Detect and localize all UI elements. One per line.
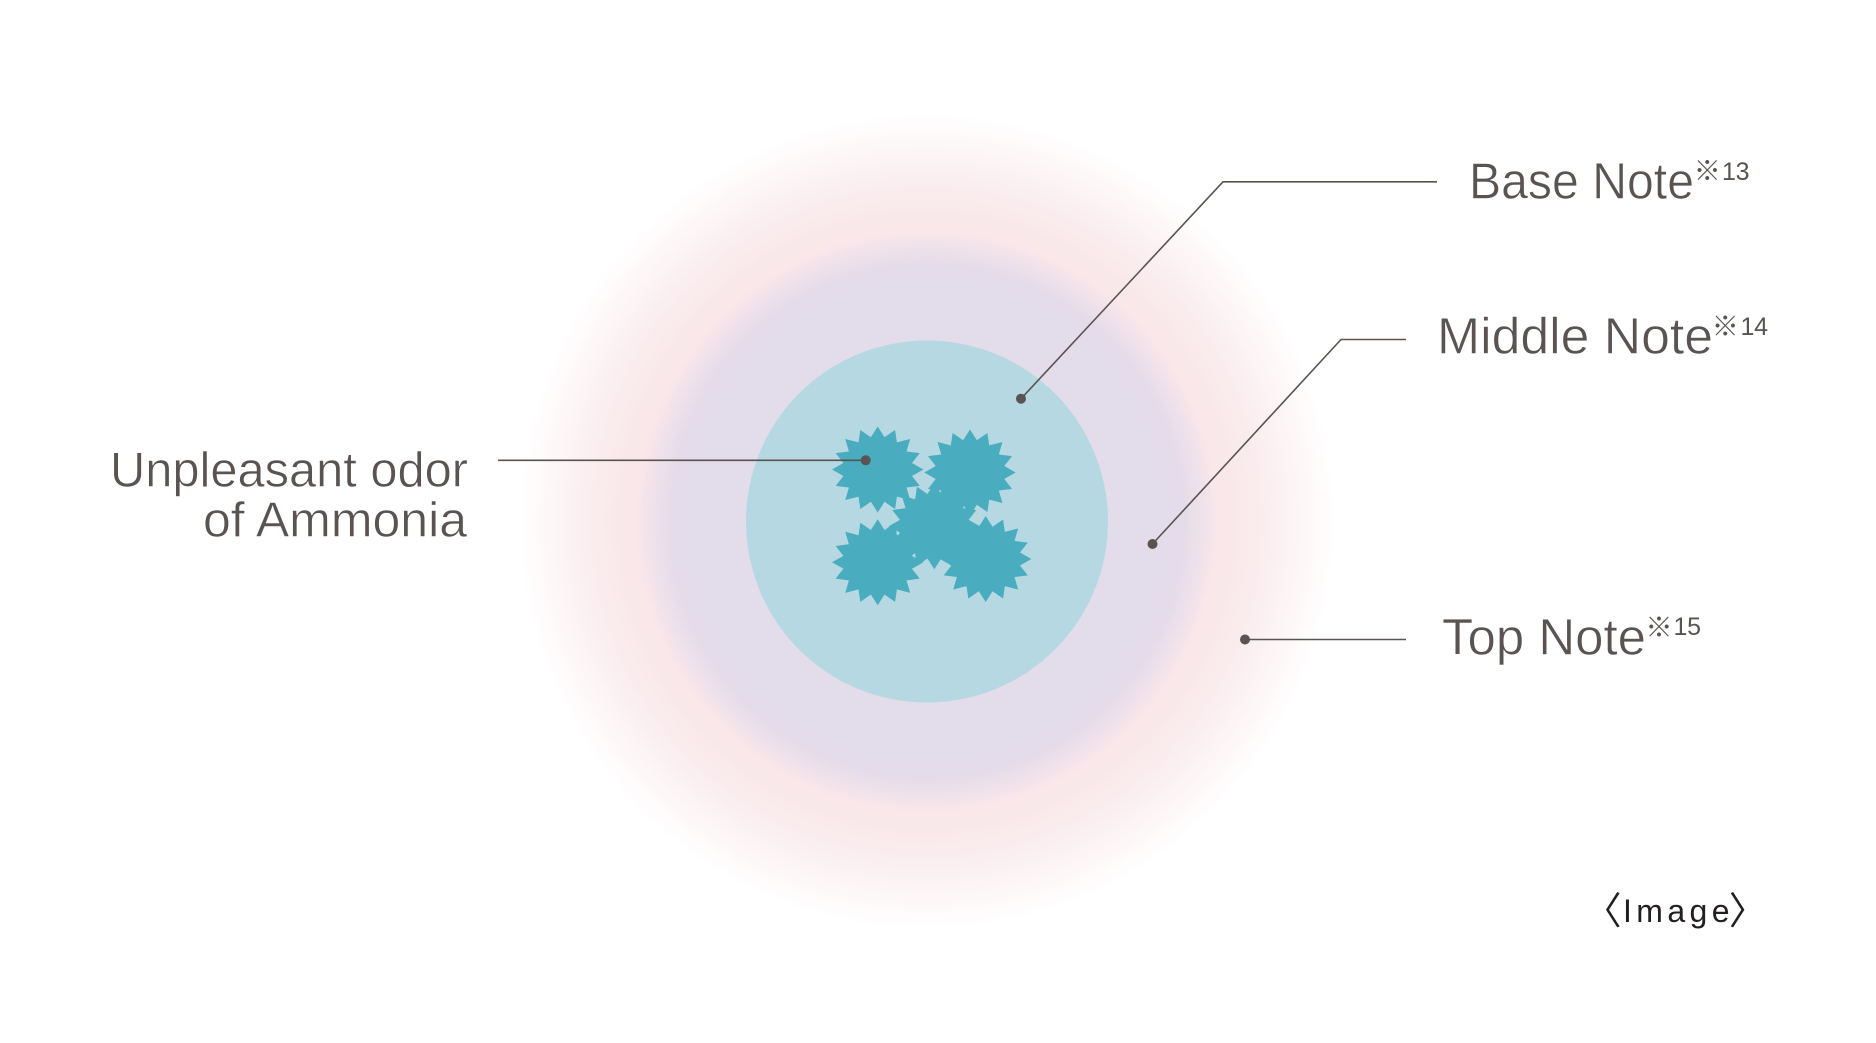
label: unpleasant odor of ammonia xyxy=(110,444,468,548)
caption: image xyxy=(1584,880,1767,935)
label: middle note: ※ xyxy=(1712,305,1739,344)
base note circle xyxy=(746,340,1108,702)
label: unpleasant odor of ammonia: Unpleasant odor xyxy=(110,444,468,498)
leader: middle note xyxy=(1148,340,1406,549)
molecule: bottom left xyxy=(832,519,923,605)
leader: base note xyxy=(1016,182,1437,404)
label: middle note: 14 xyxy=(1740,313,1768,341)
label: middle note: Middle Note xyxy=(1437,307,1713,364)
molecule: bottom right xyxy=(940,516,1031,602)
caption: image: 〈 xyxy=(1584,880,1622,935)
label: base note: 13 xyxy=(1722,158,1750,186)
molecule: top right xyxy=(924,430,1016,516)
label: base note: Base Note xyxy=(1469,152,1694,209)
leader: ammonia xyxy=(498,455,871,465)
caption: image: 〉 xyxy=(1729,880,1767,935)
label: top note: Top Note xyxy=(1442,608,1646,665)
molecule: centre xyxy=(889,483,980,569)
label: top note: 15 xyxy=(1674,613,1701,641)
top note glow and middle note ring xyxy=(519,114,1335,930)
ammonia odor molecules xyxy=(832,426,1031,605)
label: unpleasant odor of ammonia: of Ammonia xyxy=(203,494,468,548)
label: top note: ※ xyxy=(1646,606,1672,645)
caption: image: Image xyxy=(1623,893,1730,929)
molecule: top left xyxy=(832,426,923,512)
label: base note: ※ xyxy=(1694,149,1721,188)
leader: top note xyxy=(1240,634,1406,644)
